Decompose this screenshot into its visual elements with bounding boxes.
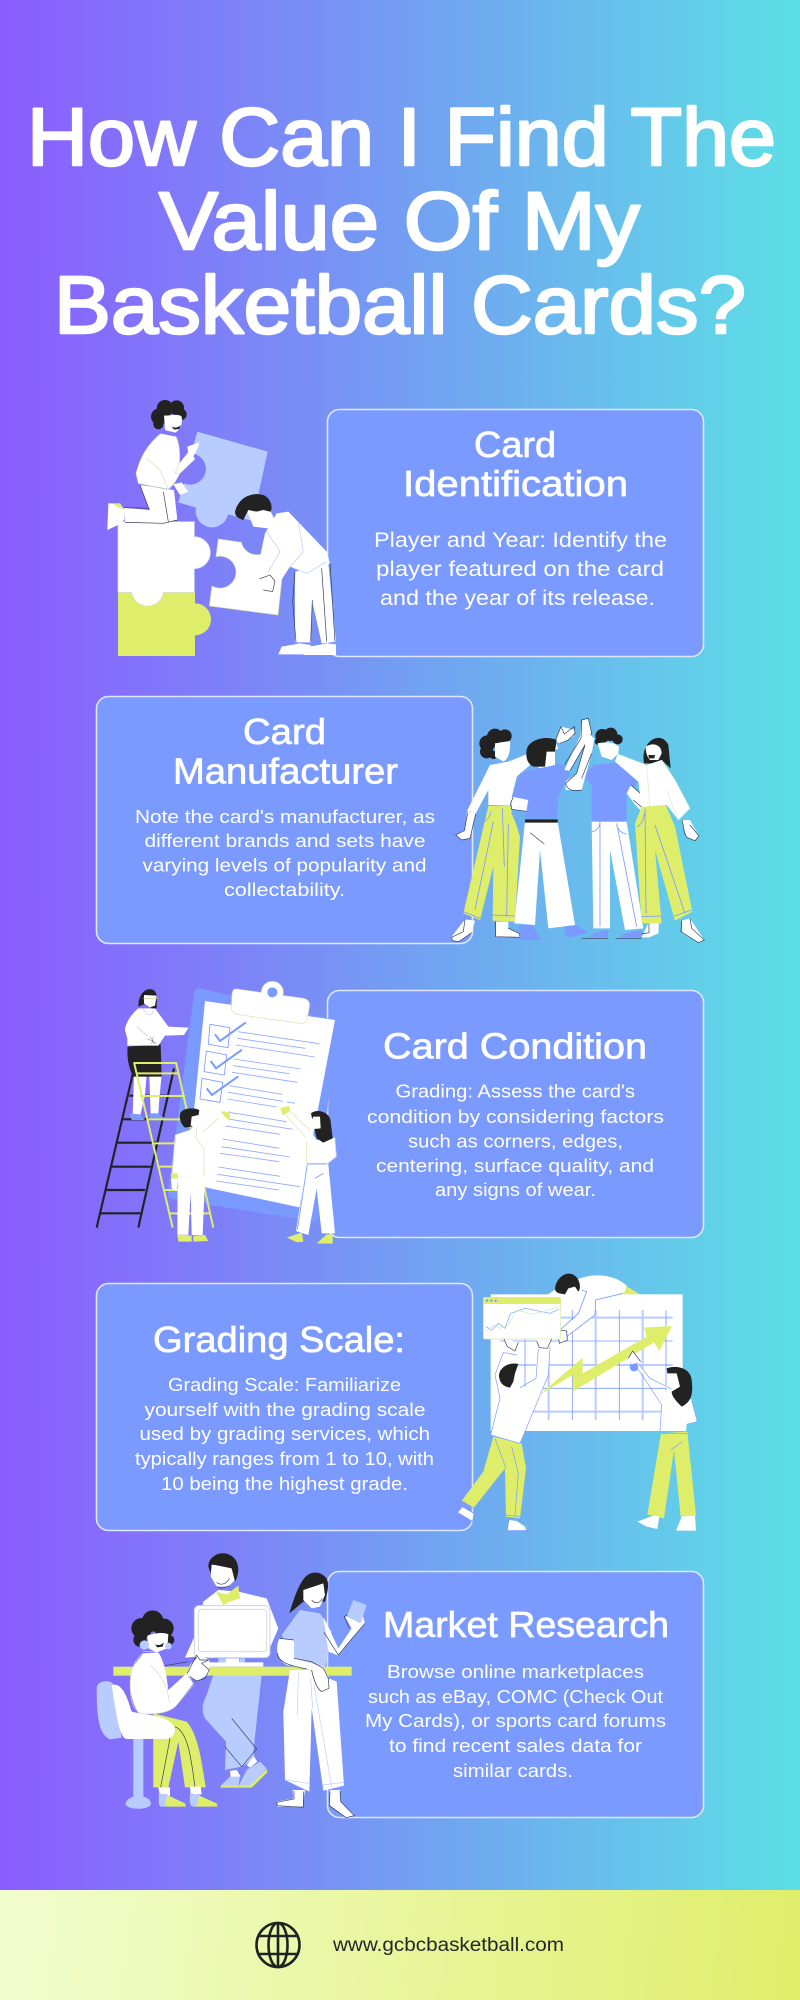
- heading: card identification: Card: [474, 424, 556, 465]
- man pointing: [171, 1101, 231, 1242]
- woman right: [615, 738, 704, 943]
- icon: globe: [256, 1923, 300, 1967]
- ladder: [97, 1068, 174, 1228]
- text: manufacturer note: [135, 806, 435, 900]
- seated woman and chair: [97, 1610, 217, 1809]
- standing man: [185, 1553, 278, 1788]
- desk: [113, 1667, 352, 1676]
- text: grading: condition by considering factors: [367, 1106, 664, 1127]
- chart board: [491, 1294, 683, 1431]
- woman pointing: [280, 1098, 337, 1244]
- panel: card condition: [328, 990, 704, 1238]
- person with short hair, back view: [511, 718, 592, 940]
- sun arc: [610, 1278, 640, 1294]
- list lines: [216, 1032, 319, 1190]
- title: [27, 92, 776, 351]
- text: player and year: [374, 529, 667, 610]
- illustration: office team at desk: [97, 1553, 367, 1818]
- illustration: growth chart with people: [457, 1274, 697, 1531]
- text: market research description: Browse online marketplaces: [387, 1661, 644, 1682]
- panel: grading scale: [96, 1284, 472, 1530]
- panel: card manufacturer: [96, 696, 472, 944]
- text: manufacturer note: varying levels of popularity and: [142, 854, 426, 876]
- text: market research description: [365, 1661, 666, 1781]
- puzzle pieces: [118, 432, 285, 656]
- yellow ladder: [134, 1062, 213, 1228]
- person kneeling: [107, 400, 199, 530]
- illustration: people assembling puzzle: [107, 400, 336, 656]
- heading: card identification: [403, 424, 628, 504]
- clipboard: [168, 981, 335, 1221]
- text: grading scale description: used by grading services, which: [140, 1423, 430, 1444]
- heading: card manufacturer: Manufacturer: [173, 750, 398, 792]
- text: grading scale description: Grading Scale: Familiarize: [168, 1374, 401, 1395]
- computer monitor: [194, 1606, 270, 1667]
- text: manufacturer note: collectability.: [224, 879, 345, 900]
- text: player and year: and the year of its release.: [380, 587, 655, 610]
- heading: market research: Market Research: [383, 1604, 669, 1645]
- text: player and year: player featured on the card: [376, 558, 664, 581]
- title: Value Of My: [159, 176, 640, 267]
- text: grading scale description: [135, 1374, 434, 1494]
- text: grading scale description: 10 being the highest grade.: [161, 1473, 408, 1494]
- text: market research description: My Cards), or sports card forums: [365, 1710, 666, 1731]
- text: grading scale description: yourself with the grading scale: [144, 1399, 426, 1420]
- heading: card identification: Identification: [403, 463, 628, 504]
- text: player and year: Player and Year: Identify the: [374, 529, 667, 552]
- panel: card identification: [328, 410, 704, 656]
- man lifting window: [457, 1339, 552, 1531]
- text: grading scale description: typically ranges from 1 to 10, with: [135, 1448, 434, 1469]
- panel: market research: [328, 1572, 704, 1818]
- woman on ladder: [125, 989, 189, 1120]
- text: manufacturer note: different brands and sets have: [144, 830, 426, 851]
- text: market research description: similar cards.: [453, 1760, 573, 1781]
- heading: card condition: Card Condition: [383, 1026, 647, 1066]
- text: grading: such as corners, edges,: [408, 1130, 623, 1152]
- growth arrow: [538, 1326, 672, 1396]
- woman pointing at chart: [628, 1350, 697, 1531]
- person bending over: [235, 494, 336, 655]
- heading: card manufacturer: [173, 711, 398, 792]
- heading: grading scale: Grading Scale:: [153, 1319, 405, 1360]
- text: market research description: such as eBay, COMC (Check Out: [368, 1686, 663, 1707]
- text: grading: [367, 1080, 664, 1200]
- man right: [566, 728, 673, 938]
- person on top: [545, 1274, 625, 1343]
- heading: card manufacturer: Card: [243, 711, 326, 752]
- title: How Can I Find The: [27, 92, 776, 183]
- woman left: [452, 727, 575, 942]
- text: market research description: to find recent sales data for: [389, 1735, 642, 1756]
- text: manufacturer note: Note the card's manufacturer, as: [135, 806, 435, 827]
- text: grading: any signs of wear.: [435, 1179, 596, 1200]
- text: grading: Grading: Assess the card's: [396, 1080, 635, 1102]
- illustration: team high five: [452, 718, 704, 943]
- text: grading: centering, surface quality, and: [376, 1155, 654, 1176]
- website url: www.gcbcbasketball.com: [332, 1935, 564, 1956]
- woman with phone: [277, 1573, 367, 1818]
- title: Basketball Cards?: [54, 260, 746, 351]
- browser window: [483, 1297, 561, 1339]
- checkboxes: [200, 1022, 246, 1102]
- footer bar: [0, 1890, 800, 2000]
- illustration: checklist clipboard with people: [97, 981, 337, 1244]
